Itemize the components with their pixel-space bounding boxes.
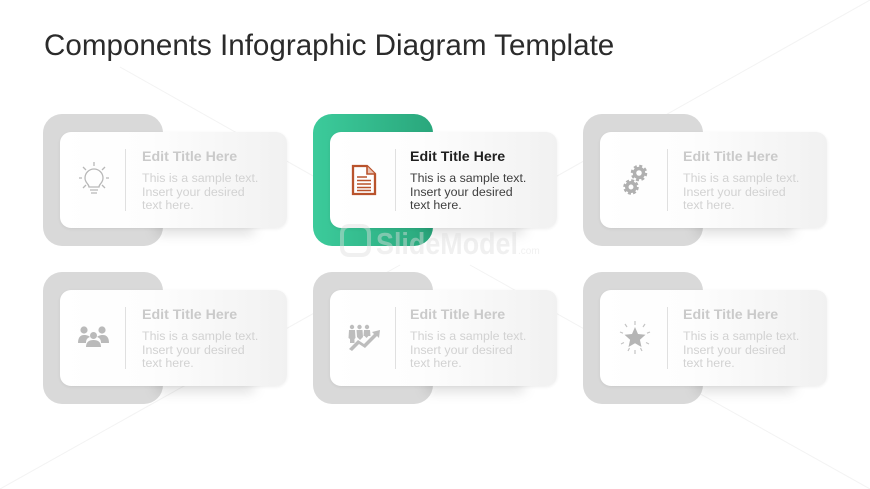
panel: document (active) [313, 114, 557, 246]
icon: people and growth arrow [348, 324, 380, 351]
text block: Insert your desired [142, 342, 245, 356]
text block: Edit Title Here [410, 149, 505, 165]
text block: text here. [142, 356, 194, 370]
panel: star [583, 272, 827, 404]
icon: team [78, 326, 109, 347]
text block: Insert your desired [683, 184, 786, 198]
watermark: SlideModel [376, 226, 518, 261]
text block: text here. [683, 356, 735, 370]
text block: This is a sample text. [683, 171, 799, 185]
icon: gears [623, 164, 648, 195]
text block: This is a sample text. [410, 171, 526, 185]
text block [142, 307, 258, 370]
icon: document [352, 164, 376, 196]
panel: idea [43, 114, 287, 246]
panel: gears [583, 114, 827, 246]
text block: text here. [683, 198, 735, 212]
text block: Edit Title Here [142, 149, 237, 165]
text block: Insert your desired [410, 342, 513, 356]
text block: Insert your desired [142, 184, 245, 198]
icon: star burst [620, 321, 650, 354]
text block: Edit Title Here [683, 149, 778, 165]
text block: text here. [410, 356, 462, 370]
text block: Insert your desired [410, 184, 513, 198]
text block: This is a sample text. [410, 329, 526, 343]
text block [683, 307, 799, 370]
panel: team [43, 272, 287, 404]
text block [410, 307, 526, 370]
text block: text here. [142, 198, 194, 212]
text block: Edit Title Here [410, 307, 505, 323]
text block: text here. [410, 198, 462, 212]
text block [410, 149, 526, 212]
text block: Edit Title Here [683, 307, 778, 323]
text block: Insert your desired [683, 342, 786, 356]
text block: Edit Title Here [142, 307, 237, 323]
title: Components Infographic Diagram Template [44, 29, 614, 62]
text block [683, 149, 799, 212]
watermark: .com [518, 246, 540, 257]
text block: This is a sample text. [683, 329, 799, 343]
text block: This is a sample text. [142, 329, 258, 343]
icon: light bulb [79, 162, 109, 194]
panel: growth [313, 272, 557, 404]
text block: This is a sample text. [142, 171, 258, 185]
text block [142, 149, 258, 212]
